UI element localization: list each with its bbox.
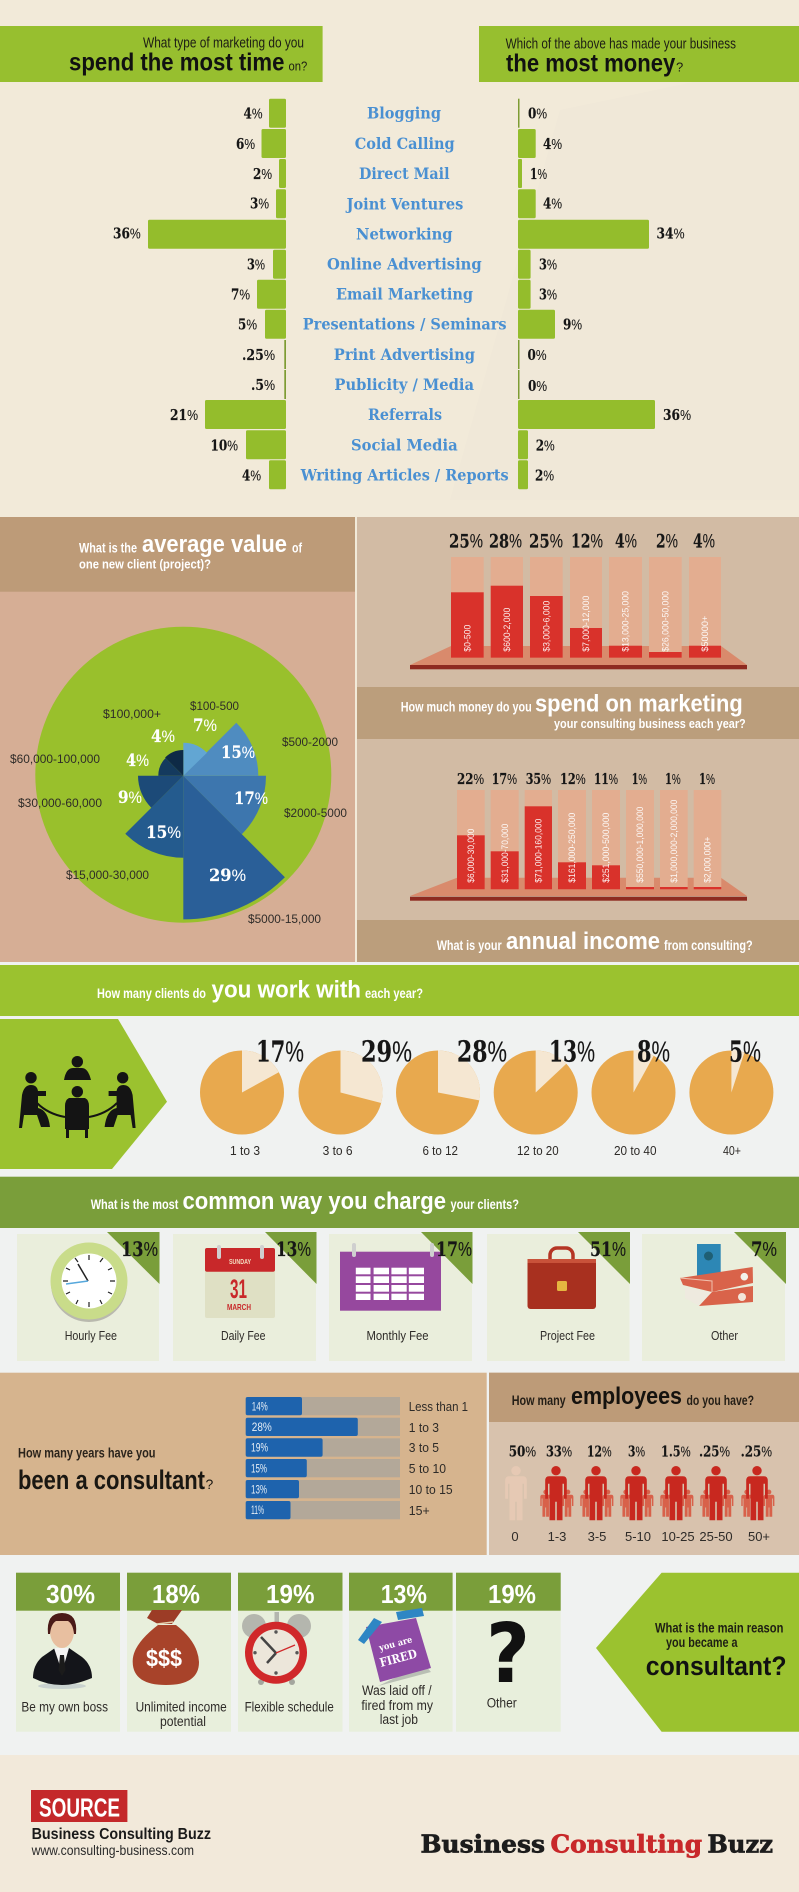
chart: annual income: $161,000-250,000 — [567, 813, 578, 883]
chart: marketing spend: $26,000-50,000 — [660, 591, 672, 652]
row: Social Media: 10% — [210, 436, 238, 454]
panel: years as a consultant: ? — [206, 1476, 214, 1492]
row: Social Media: Social Media — [351, 435, 458, 454]
row: Referrals: 21% — [170, 406, 198, 424]
card: unlimited income: 18% — [152, 1579, 200, 1609]
card: monthly fee: 17% — [436, 1237, 472, 1261]
chart: marketing spend: 25% — [529, 531, 563, 553]
chart: annual income: 35% — [526, 770, 551, 788]
chart: years bars: 15% — [251, 1462, 267, 1476]
pie: 3 to 6: 29% — [361, 1035, 412, 1069]
pie: 1 to 3: 1 to 3 — [230, 1143, 260, 1158]
chart: annual income: $6,000-30,000 — [466, 829, 477, 883]
chart: annual income: 1% — [699, 770, 715, 788]
card: project fee: 51% — [590, 1237, 626, 1261]
chart: annual income: $550,000-1,000,000 — [635, 807, 646, 883]
heading: annual income: from consulting? — [664, 937, 753, 953]
row: Email Marketing: 3% — [539, 286, 557, 304]
row: Publicity / Media: Publicity / Media — [334, 375, 474, 394]
pie: 3 to 6 — [298, 1035, 412, 1158]
card: daily fee: 13% — [276, 1237, 311, 1261]
row: Joint Ventures: 4% — [543, 194, 562, 212]
chart: polar area value chart: $5000-15,000 — [248, 914, 321, 926]
pie: 6 to 12 — [396, 1035, 507, 1158]
chart: marketing spend — [410, 531, 747, 669]
logo: Business Consulting Buzz — [420, 1830, 773, 1859]
card: be my own boss: Be my own boss — [21, 1700, 108, 1715]
icon: businessman — [33, 1613, 92, 1689]
chart: years bars: 13% — [251, 1482, 267, 1496]
source credit: Business Consulting Buzz — [32, 1826, 211, 1843]
card: laid off: last job — [380, 1712, 418, 1727]
card: flexible schedule — [238, 1573, 342, 1732]
header: most money made: Which of the above has made your business — [506, 36, 736, 53]
chart: employee people: .25% — [699, 1443, 730, 1461]
chart: years bars: Less than 1 — [409, 1399, 468, 1414]
row: Writing Articles / Reports — [242, 460, 554, 489]
chart: marketing spend: 28% — [489, 531, 522, 553]
row: Networking: Networking — [356, 225, 453, 244]
pie: 40+: 40+ — [723, 1143, 741, 1158]
chart: polar area value chart: 29% — [209, 866, 246, 886]
row: Email Marketing — [231, 280, 557, 309]
card: hourly fee: 13% — [121, 1237, 158, 1261]
row: Referrals — [170, 400, 691, 429]
heading: clients per year: you work with — [212, 977, 361, 1004]
row: Referrals: 36% — [663, 406, 691, 424]
row: Online Advertising: Online Advertising — [327, 255, 482, 274]
pie: 12 to 20 — [494, 1035, 595, 1158]
card: unlimited income: potential — [160, 1714, 206, 1729]
chart: annual income: $251,000-500,000 — [601, 813, 612, 883]
chart: annual income: $2,000,000+ — [702, 836, 714, 883]
row: Cold Calling — [236, 129, 562, 158]
chart: marketing spend: 12% — [571, 531, 603, 553]
chart: years bars: 3 to 5 — [409, 1440, 439, 1455]
header: most money made: the most money — [506, 50, 675, 78]
row: Presentations / Seminars: Presentations / Seminars — [303, 315, 507, 334]
heading: average value: What is the — [79, 540, 137, 556]
chart: employee people: 33% — [546, 1443, 572, 1461]
pie: 1 to 3 — [200, 1035, 304, 1158]
header: most money made: ? — [676, 60, 683, 75]
row: Writing Articles / Reports: 4% — [242, 466, 261, 484]
row: Print Advertising: 0% — [528, 346, 546, 364]
chart: annual income: 1% — [665, 770, 681, 788]
row: Social Media — [210, 430, 555, 459]
chart: marketing spend: 2% — [656, 531, 678, 553]
chart: annual income: 1% — [632, 770, 647, 788]
heading: average value: average value — [142, 531, 287, 558]
chart: employee people: 12% — [587, 1443, 612, 1461]
chart: polar area value chart: $100,000+ — [103, 709, 161, 721]
chart: polar area value chart: $60,000-100,000 — [10, 754, 100, 766]
card: other fee: 7% — [751, 1237, 777, 1261]
row: Direct Mail: 1% — [530, 165, 547, 183]
chart: polar area value chart: 4% — [126, 751, 149, 771]
heading: average value: one new client (project)? — [79, 557, 211, 572]
chart: years bars: 5 to 10 — [409, 1461, 446, 1476]
row: Blogging: 4% — [244, 105, 262, 123]
card: hourly fee: Hourly Fee — [65, 1328, 117, 1343]
pie: 3 to 6: 3 to 6 — [323, 1143, 353, 1158]
heading: how you charge: your clients? — [450, 1196, 519, 1212]
header: time spent on marketing: spend the most time — [69, 49, 284, 77]
arrow: green tab — [0, 1019, 167, 1169]
card: daily fee: Daily Fee — [221, 1328, 266, 1343]
card: laid off: 13% — [381, 1579, 427, 1609]
row: Online Advertising: 3% — [539, 256, 557, 274]
chart: years bars: 19% — [251, 1440, 268, 1454]
chart: annual income: 11% — [594, 770, 618, 788]
row: Presentations / Seminars: 9% — [563, 316, 582, 334]
heading: annual income: What is your — [437, 937, 502, 953]
row: Cold Calling: 4% — [543, 135, 562, 153]
card: monthly fee — [329, 1232, 472, 1361]
chart: employee people: .25% — [741, 1443, 772, 1461]
chart: employee people: 0 — [511, 1529, 519, 1544]
heading: how many employees: do you have? — [686, 1392, 754, 1408]
source credit: SOURCE — [39, 1793, 120, 1823]
heading: spend on marketing: your consulting business each year? — [554, 716, 746, 731]
icon: alarm clock — [242, 1612, 311, 1685]
row: Joint Ventures: 3% — [250, 194, 269, 212]
chart: employee people: 25-50 — [699, 1529, 733, 1544]
card: laid off: fired from my — [361, 1698, 433, 1713]
row: Networking — [113, 220, 684, 249]
icon: people around a table — [19, 1056, 136, 1138]
source credit — [31, 1790, 211, 1858]
heading: average value — [0, 517, 355, 592]
heading: average value: of — [292, 540, 302, 556]
heading: annual income: annual income — [506, 928, 660, 955]
chart: marketing spend: $50000+ — [700, 615, 711, 652]
source credit: www.consulting-business.com — [31, 1842, 194, 1858]
heading: clients per year: How many clients do — [97, 985, 206, 1001]
row: Print Advertising: .25% — [242, 346, 275, 364]
chart: annual income: 17% — [492, 770, 517, 788]
row: Publicity / Media: 0% — [528, 377, 547, 395]
header: time spent on marketing — [0, 26, 323, 82]
icon: briefcase — [528, 1248, 596, 1309]
icon: money bag — [133, 1610, 199, 1685]
chart: years bars: 28% — [252, 1420, 272, 1434]
card: unlimited income: Unlimited income — [136, 1700, 227, 1715]
icon: fired note: you are — [377, 1635, 414, 1654]
card: other fee: Other — [711, 1328, 739, 1343]
callout: main reason arrow — [596, 1573, 799, 1732]
header: time spent on marketing: on? — [288, 59, 307, 74]
pie: 6 to 12: 28% — [457, 1035, 507, 1069]
chart: polar area value chart: $30,000-60,000 — [18, 798, 102, 810]
icon: month calendar — [340, 1243, 441, 1311]
chart: employee people: 5-10 — [625, 1529, 651, 1544]
chart: annual income: 22% — [457, 770, 484, 788]
chart: employee people: 1-3 — [548, 1529, 566, 1544]
card: project fee: Project Fee — [540, 1328, 595, 1343]
pie: 1 to 3: 17% — [256, 1035, 304, 1069]
chart: polar area value chart: 17% — [234, 789, 268, 809]
footer background — [0, 1755, 799, 1892]
icon: binders and book — [680, 1244, 753, 1306]
row: Social Media: 2% — [536, 436, 555, 454]
chart: employee people: 10-25 — [661, 1529, 695, 1544]
row: Direct Mail: Direct Mail — [359, 164, 450, 183]
pie: 20 to 40 — [592, 1035, 676, 1158]
chart: marketing spend: 4% — [693, 531, 715, 553]
pie: 6 to 12: 6 to 12 — [422, 1143, 458, 1158]
chart: employee people: 3-5 — [588, 1529, 606, 1544]
chart: polar area value chart: $100-500 — [190, 701, 239, 713]
row: Email Marketing: Email Marketing — [336, 285, 473, 304]
logo: Business Consulting Buzz: Buzz — [707, 1830, 773, 1859]
icon: day calendar — [205, 1245, 275, 1318]
heading: how you charge — [0, 1177, 799, 1228]
pie: 12 to 20: 12 to 20 — [517, 1143, 559, 1158]
chart: years bars: 1 to 3 — [409, 1420, 439, 1435]
card: laid off: Was laid off / — [362, 1683, 432, 1698]
card: project fee — [487, 1232, 630, 1361]
chart: polar area value chart — [10, 627, 347, 926]
heading: spend on marketing: How much money do you — [401, 699, 532, 715]
row: Cold Calling: Cold Calling — [355, 134, 455, 153]
row: Online Advertising — [247, 250, 557, 279]
logo: Business Consulting Buzz: Consulting — [550, 1830, 702, 1859]
row: Email Marketing: 7% — [231, 286, 250, 304]
row: Publicity / Media — [251, 370, 547, 399]
pie: 40+ — [689, 1035, 773, 1158]
icon: question mark: ? — [486, 1607, 530, 1702]
heading: clients per year — [0, 965, 799, 1016]
row: Direct Mail: 2% — [253, 165, 272, 183]
card: other reason: Other — [487, 1696, 517, 1711]
row: Presentations / Seminars — [238, 310, 582, 339]
panel: years as a consultant: How many years have you — [18, 1445, 156, 1461]
chart: employee people: 1.5% — [661, 1443, 691, 1461]
chart: marketing spend: 4% — [615, 531, 637, 553]
chart: employee people: 50+ — [748, 1529, 770, 1544]
chart: years bars — [246, 1397, 468, 1519]
marketing comparison chart — [113, 99, 691, 489]
row: Presentations / Seminars: 5% — [238, 316, 257, 334]
heading: clients per year: each year? — [365, 985, 423, 1001]
chart: clients per year pies — [200, 1035, 773, 1158]
row: Cold Calling: 6% — [236, 135, 255, 153]
chart: polar area value chart: 15% — [146, 823, 181, 843]
chart: annual income: $1,000,000-2,000,000 — [669, 800, 680, 883]
chart: employee people: 3% — [628, 1443, 645, 1461]
heading: spend on marketing — [357, 687, 799, 739]
card: laid off — [349, 1573, 453, 1732]
heading: spend on marketing: spend on marketing — [535, 691, 743, 718]
panel: years as a consultant: been a consultant — [18, 1465, 205, 1495]
heading: how you charge: What is the most — [91, 1196, 179, 1212]
row: Blogging: Blogging — [367, 104, 441, 123]
chart: polar area value chart: $500-2000 — [282, 737, 338, 749]
icon: day calendar: SUNDAY — [229, 1259, 251, 1266]
header: most money made — [479, 26, 799, 82]
card: be my own boss: 30% — [46, 1579, 95, 1609]
pie: 20 to 40: 20 to 40 — [614, 1143, 656, 1158]
chart: annual income: $31,000-70,000 — [500, 824, 511, 883]
chart: polar area value chart: 7% — [193, 716, 217, 736]
card: other fee — [642, 1232, 786, 1361]
header: time spent on marketing: What type of marketing do you — [143, 35, 304, 52]
icon: fired note: FIRED — [378, 1647, 418, 1670]
chart: years bars: 11% — [251, 1503, 264, 1517]
callout: main reason arrow: consultant? — [646, 1651, 786, 1681]
chart: annual income: 12% — [560, 770, 586, 788]
card: monthly fee: Monthly Fee — [366, 1328, 429, 1343]
chart: employee people — [505, 1443, 774, 1544]
chart: years bars: 14% — [252, 1400, 268, 1414]
chart: marketing spend: $13,000-25,000 — [620, 591, 632, 652]
panel: employees — [489, 1373, 799, 1555]
icon: money bag: $$$ — [146, 1645, 183, 1672]
chart: marketing spend: 25% — [449, 531, 483, 553]
row: Publicity / Media: .5% — [251, 376, 275, 394]
card: other reason: 19% — [488, 1579, 536, 1609]
chart: marketing spend: $0-500 — [462, 625, 474, 652]
row: Joint Ventures — [250, 189, 562, 218]
chart: polar area value chart: $15,000-30,000 — [66, 870, 149, 882]
chart: polar area value chart: $2000-5000 — [284, 808, 347, 820]
icon: fired note — [358, 1608, 431, 1686]
row: Blogging: 0% — [528, 105, 547, 123]
pie: 40+: 5% — [729, 1035, 761, 1069]
chart: marketing spend: $3,000-6,000 — [542, 601, 552, 652]
heading: how many employees: employees — [571, 1383, 682, 1410]
icon: day calendar: MARCH — [227, 1302, 251, 1312]
row: Print Advertising: Print Advertising — [334, 345, 475, 364]
panel: marketing spend and income — [357, 517, 799, 962]
card: flexible schedule: 19% — [266, 1579, 314, 1609]
chart: employee people: 50% — [509, 1443, 536, 1461]
card: daily fee — [173, 1232, 316, 1361]
row: Print Advertising — [242, 340, 546, 369]
icon: wall clock — [50, 1242, 128, 1322]
icon: day calendar: 31 — [230, 1274, 247, 1304]
panel: years as a consultant — [0, 1373, 487, 1555]
row: Networking: 34% — [656, 225, 684, 243]
chart: years bars: 10 to 15 — [409, 1482, 453, 1497]
chart: marketing spend: $7,000-12,000 — [581, 596, 592, 652]
card: flexible schedule: Flexible schedule — [245, 1700, 334, 1715]
heading: annual income — [357, 920, 799, 962]
chart: annual income: $71,000-160,000 — [534, 819, 544, 883]
row: Referrals: Referrals — [368, 405, 442, 424]
row: Online Advertising: 3% — [247, 256, 265, 274]
heading: how many employees: How many — [512, 1392, 566, 1408]
chart: polar area value chart: 9% — [118, 788, 142, 808]
chart: polar area value chart: 4% — [151, 727, 175, 747]
chart: marketing spend: $600-2,000 — [502, 608, 513, 652]
heading: how you charge: common way you charge — [182, 1188, 446, 1215]
card: other reason — [456, 1573, 561, 1732]
card: hourly fee — [17, 1232, 160, 1361]
panel: average client value — [0, 517, 355, 962]
row: Networking: 36% — [113, 225, 141, 243]
pie: 12 to 20: 13% — [549, 1035, 595, 1069]
card: be my own boss — [16, 1573, 120, 1732]
row: Blogging — [244, 99, 547, 128]
heading: how many employees — [489, 1373, 799, 1422]
chart: polar area value chart: 15% — [221, 743, 255, 763]
row: Writing Articles / Reports: 2% — [535, 466, 554, 484]
chart: years bars: 15+ — [409, 1503, 430, 1518]
callout: main reason arrow: you became a — [666, 1634, 738, 1650]
card: unlimited income — [127, 1573, 231, 1732]
row: Joint Ventures: Joint Ventures — [345, 194, 463, 213]
row: Writing Articles / Reports: Writing Articles / Reports — [300, 465, 509, 484]
pie: 20 to 40: 8% — [637, 1035, 670, 1069]
row: Direct Mail — [253, 159, 547, 188]
chart: annual income — [410, 770, 747, 901]
logo: Business Consulting Buzz: Business — [420, 1830, 545, 1859]
